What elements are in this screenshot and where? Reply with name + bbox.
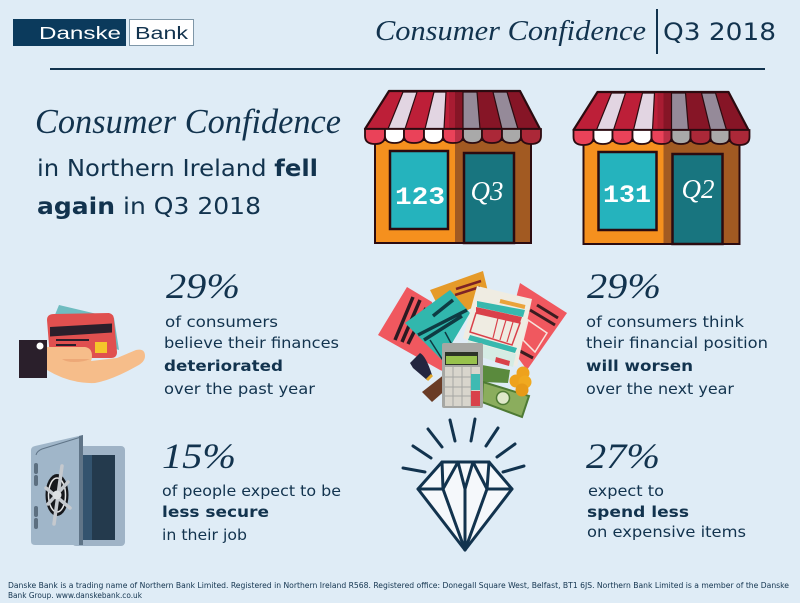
- footer disclaimer: [8, 581, 789, 600]
- stat: finances deteriorated: over the past year: [164, 380, 316, 398]
- stat: financial position will worsen: of consumers think: [586, 313, 744, 331]
- header title: Consumer Confidence: [375, 16, 646, 47]
- stat: financial position will worsen: their financial position: [586, 334, 768, 352]
- stat: spend less: spend less: [587, 503, 689, 521]
- header title: Q3 2018: [663, 18, 776, 46]
- stat: spend less: on expensive items: [587, 523, 746, 541]
- logo: Danske Bank: Danske: [39, 23, 121, 43]
- header title: [375, 9, 776, 54]
- headline: Consumer Confidence: [35, 102, 341, 141]
- stat: finances deteriorated: of consumers: [165, 313, 278, 331]
- shop: Q3 score 123: Q3: [470, 176, 504, 206]
- shop: Q2 score 131: [574, 92, 750, 244]
- stat: financial position will worsen: 29%: [587, 266, 661, 306]
- shop: Q2 score 131: 131: [603, 181, 651, 210]
- stat: financial position will worsen: will worsen: [586, 357, 693, 375]
- stat: less secure in job: 15%: [162, 436, 236, 476]
- icon: hand holding credit cards: [19, 305, 145, 383]
- logo: Danske Bank: [13, 19, 194, 46]
- shop: Q3 score 123: 123: [395, 183, 445, 212]
- footer disclaimer: Bank Group. www.danskebank.co.uk: [8, 591, 142, 600]
- logo: Danske Bank: Bank: [135, 23, 188, 43]
- headline: in Northern Ireland fell: [37, 154, 318, 182]
- stat: finances deteriorated: 29%: [166, 266, 240, 306]
- stat: financial position will worsen: [586, 266, 768, 398]
- stat: finances deteriorated: [164, 266, 339, 398]
- headline: [35, 102, 341, 220]
- stat: less secure in job: [162, 436, 341, 544]
- icon: open safe: [31, 435, 125, 546]
- stat: spend less: 27%: [586, 436, 660, 476]
- shop: Q3 score 123: [365, 91, 541, 243]
- headline: again in Q3 2018: [37, 192, 261, 220]
- stat: financial position will worsen: over the next year: [586, 380, 735, 398]
- icon: diamond: [403, 419, 524, 550]
- icon: bills and calculator: [378, 271, 567, 417]
- stat: spend less: expect to: [588, 482, 664, 500]
- stat: less secure in job: in their job: [162, 526, 247, 544]
- stat: spend less: [586, 436, 746, 541]
- shop: Q2 score 131: Q2: [682, 174, 714, 204]
- stat: finances deteriorated: deteriorated: [164, 357, 283, 375]
- stat: finances deteriorated: believe their finances: [164, 334, 339, 352]
- stat: less secure in job: less secure: [162, 503, 269, 521]
- stat: less secure in job: of people expect to be: [162, 482, 341, 500]
